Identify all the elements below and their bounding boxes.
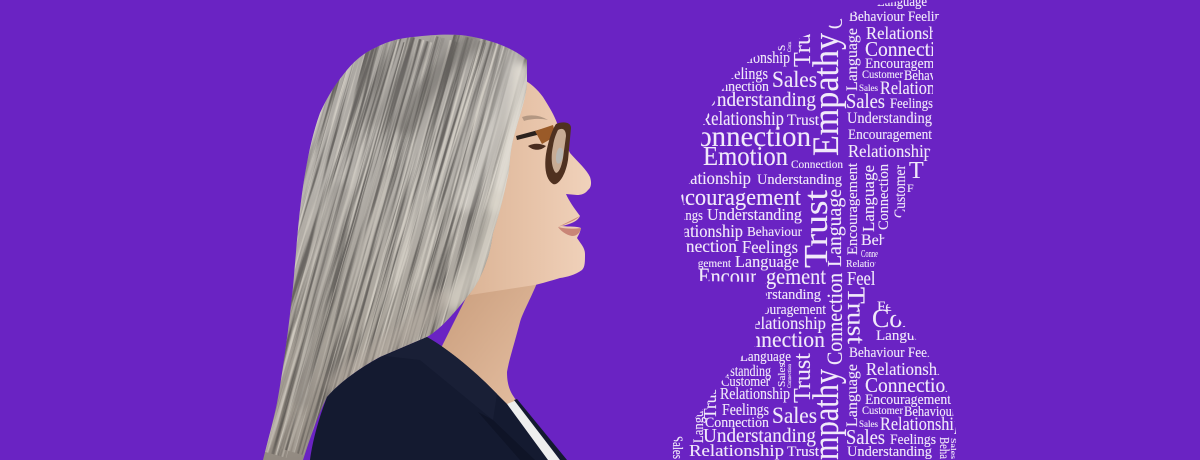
lower word cloud: right column: Relationship: [866, 359, 950, 379]
upper word cloud: vertical words: Connection: [822, 273, 847, 365]
upper word cloud: vertical words: Trust: [842, 287, 869, 344]
lower word cloud: right column: Encouragement: [865, 392, 952, 408]
navy blazer: [310, 337, 567, 460]
word cloud silhouette: [672, 0, 956, 460]
upper word cloud: vertical words: Connection: [788, 27, 793, 52]
upper word cloud: left block: Encouragement: [660, 256, 732, 270]
lower word cloud: right column: Behaviour Feelings: [849, 345, 953, 361]
lower word cloud: vertical words: Language: [844, 364, 861, 427]
lower word cloud: right column: Understanding: [847, 444, 932, 460]
upper word cloud: vertical words: Language: [859, 165, 878, 232]
upper word cloud: right column: Customer: [862, 69, 903, 81]
upper word cloud: right column: Feelings: [890, 96, 933, 112]
upper word cloud: right column: [846, 0, 940, 343]
upper word cloud: left block: Connection: [657, 236, 737, 256]
upper word cloud: right column: Encouragement: [865, 56, 952, 72]
lower word cloud: left block: Understanding: [700, 363, 771, 380]
glasses: [516, 122, 571, 184]
upper word cloud: left block: Connection: [678, 120, 811, 153]
upper word cloud: left block: Connection: [705, 79, 769, 95]
upper word cloud: left block: Encouragement: [660, 185, 801, 211]
lower word cloud: right column: [846, 345, 962, 460]
lower word cloud: left block: Customer: [721, 374, 770, 390]
upper word cloud: left block: Relationship: [700, 108, 784, 130]
upper word cloud: right column: Relationship: [880, 78, 962, 99]
dark crown and broad light strands: [300, 42, 522, 400]
upper word cloud: right column: Language: [876, 328, 935, 344]
upper word cloud: left block: Emotion: [703, 141, 788, 171]
upper word cloud: vertical words: Language: [824, 189, 846, 267]
upper word cloud: left block: Understanding: [757, 172, 842, 188]
upper word cloud: right column: Connection: [872, 304, 992, 333]
upper word cloud: left block: Relationship: [720, 48, 790, 67]
upper word cloud: vertical words: Trust: [798, 189, 835, 268]
upper word cloud: left block: Behaviour: [747, 225, 802, 240]
lower word cloud: left block: Relationship: [689, 441, 784, 460]
lower word cloud: left block: Understanding: [703, 425, 816, 447]
upper word cloud: left block: Understanding: [707, 205, 802, 224]
upper word cloud: left block: Trust: [787, 112, 820, 129]
eye and brow: [528, 144, 546, 150]
white shirt: [507, 400, 560, 460]
lower word cloud: vertical words: Sales: [949, 438, 957, 459]
woman in profile: [263, 34, 592, 460]
upper word cloud: left block: Understanding: [736, 287, 821, 303]
lower word cloud: left block: Trust: [787, 444, 820, 460]
upper word cloud: vertical words: Encouragement: [845, 162, 861, 255]
upper word cloud: vertical words: Sales: [776, 27, 788, 51]
fine hair texture: [265, 34, 527, 458]
lower word cloud: left block: Language: [740, 349, 791, 365]
upper word cloud: left block: Feelings: [720, 64, 768, 83]
upper word cloud: left block: Encouragement: [698, 264, 827, 289]
lower word cloud: vertical words: mpathy: [806, 369, 847, 460]
lower word cloud: left block: [689, 349, 820, 460]
lower word cloud: left block: Connection: [705, 415, 769, 431]
upper word cloud: left block: Relationship: [742, 313, 826, 333]
upper word cloud: right column: Feelings: [877, 299, 928, 315]
upper word cloud: vertical words: Trust: [790, 17, 816, 67]
upper word cloud: right column: Behaviour: [904, 68, 956, 84]
lower word cloud: right column: Relationship: [880, 414, 962, 435]
lower word cloud: vertical words: Sales: [776, 363, 788, 387]
lower word cloud: vertical words: [669, 353, 957, 460]
upper word cloud: left block: Sales: [772, 67, 817, 92]
lower word cloud: vertical words: Trust: [700, 383, 720, 419]
upper word cloud: right column: Connection: [865, 37, 955, 61]
upper word cloud: right column: F: [907, 181, 914, 195]
upper word cloud: right column: Connection: [861, 248, 891, 260]
lower word cloud: vertical words: Language: [691, 393, 707, 443]
upper word cloud: right column: Understanding: [847, 110, 932, 127]
lower word cloud: left block: Feelings: [722, 400, 769, 419]
upper word cloud: left block: Relationship: [667, 168, 751, 188]
upper word cloud: left block: [681, 51, 843, 347]
upper word cloud: left block: Understanding: [703, 89, 816, 111]
infographic canvas: [263, 0, 956, 460]
lower word cloud: right column: Sales: [859, 419, 878, 429]
upper word cloud: left block: Encouragement: [742, 302, 826, 318]
upper word cloud: left block: Connection: [791, 157, 843, 171]
lower word cloud: vertical words: Trust: [790, 353, 816, 403]
lower word cloud: left block: Relationship: [720, 384, 790, 403]
lower word cloud: right column: Connection: [865, 373, 955, 397]
upper word cloud: right column: Behaviour Feelings: [849, 9, 953, 25]
upper word cloud: vertical words: [776, 0, 909, 365]
upper word cloud: left block: Relationship: [660, 221, 743, 241]
hair: [263, 34, 527, 460]
upper word cloud: vertical words: Customer: [892, 164, 909, 218]
lower word cloud: left block: Sales: [772, 403, 817, 428]
upper word cloud: right column: Relationship: [866, 23, 950, 43]
upper word cloud: right column: Sales: [846, 89, 885, 113]
lips: [558, 216, 581, 236]
upper word cloud: right column: Sales: [859, 83, 878, 93]
neck and face: [440, 78, 591, 412]
upper word cloud: left block: Feelings: [742, 237, 798, 257]
lower word cloud: right column: Sales: [846, 425, 885, 449]
lower word cloud: vertical words: Connection: [788, 363, 793, 388]
upper word cloud: right column: Behaviour: [861, 232, 928, 249]
upper word cloud: right column: Relationship: [846, 258, 896, 270]
lower word cloud: right column: Behaviour: [904, 404, 956, 420]
upper word cloud: left block: Feelings: [660, 208, 703, 224]
upper word cloud: right column: Encouragement: [848, 127, 932, 143]
upper word cloud: left block: Language: [735, 252, 799, 271]
upper word cloud: vertical words: Connection: [876, 164, 892, 230]
upper word cloud: right column: Feelings: [847, 268, 903, 290]
upper word cloud: vertical words: Empathy: [806, 33, 847, 156]
lower word cloud: right column: Feelings: [890, 432, 936, 448]
lower word cloud: right column: Customer: [862, 405, 903, 417]
upper word cloud: left block: Connection: [725, 327, 825, 352]
upper word cloud: vertical words: Language: [844, 28, 861, 91]
upper word cloud: right column: T: [909, 158, 924, 184]
upper word cloud: right column: Relationship: [848, 141, 932, 161]
